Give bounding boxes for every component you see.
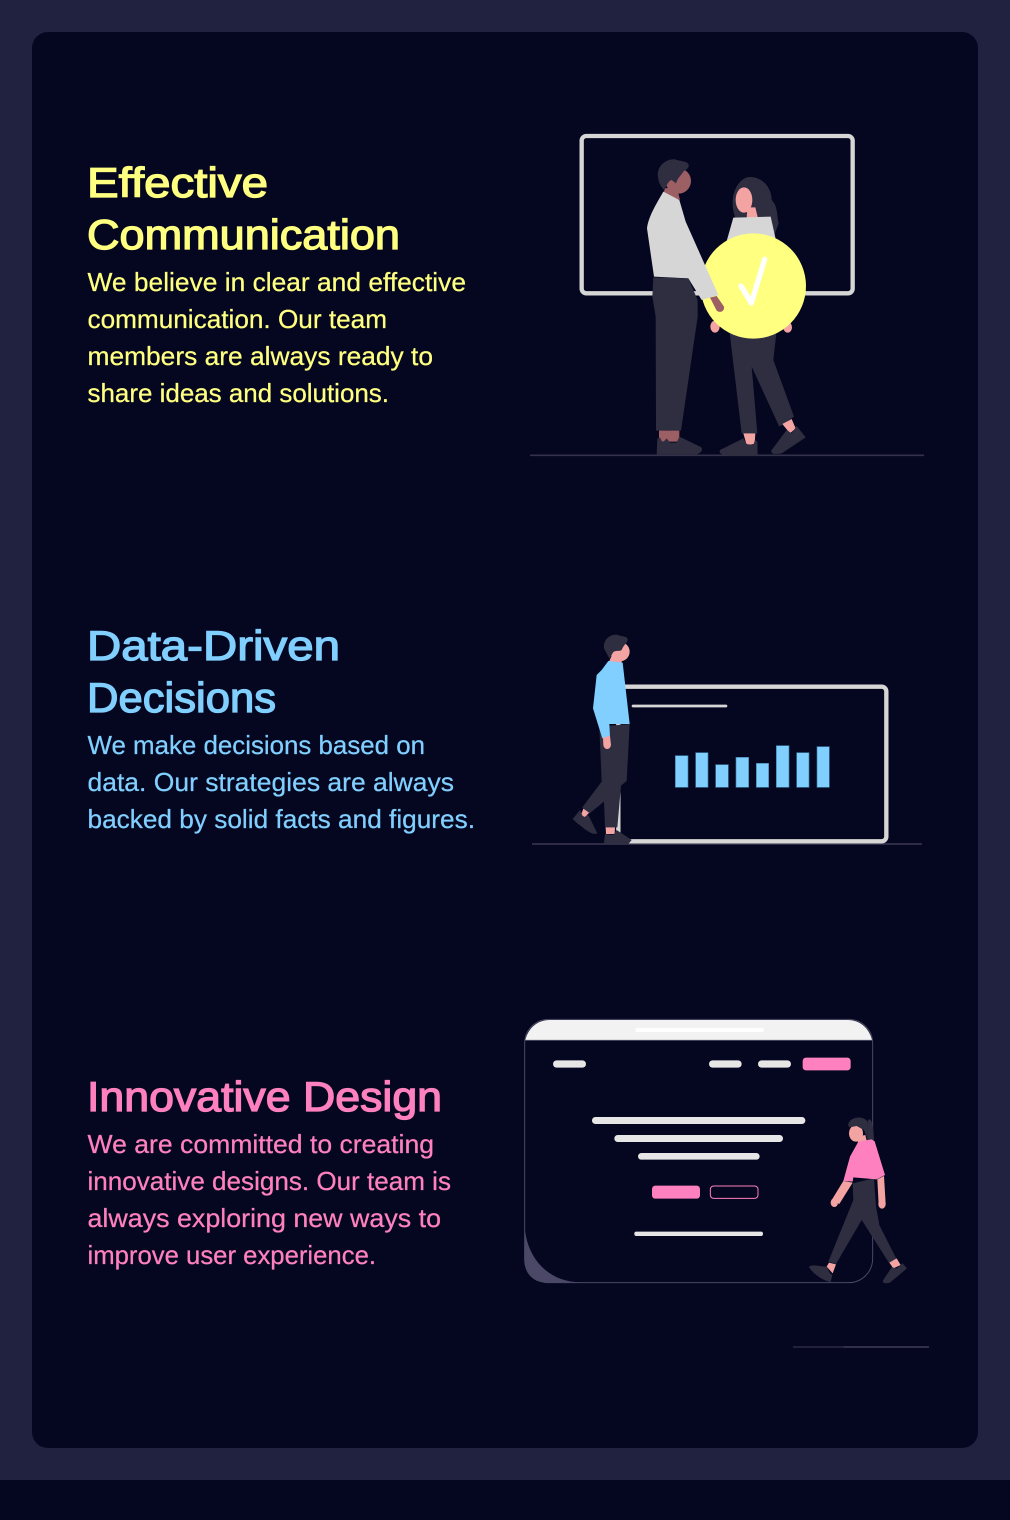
heading: Data-Driven Decisions: Data-Driven xyxy=(87,622,340,669)
hero text lines xyxy=(592,1117,805,1236)
text block: data description: We make decisions based on xyxy=(88,730,425,760)
board title line xyxy=(633,702,726,710)
illustration: man with bar chart board xyxy=(532,635,922,844)
ground line xyxy=(793,1345,929,1349)
text block: data description xyxy=(88,730,475,834)
man xyxy=(647,159,724,454)
woman xyxy=(710,177,806,456)
text block: design description xyxy=(88,1129,451,1270)
illustration: two people with check badge xyxy=(530,136,924,456)
man figure xyxy=(573,635,632,844)
heading: Data-Driven Decisions xyxy=(87,622,340,721)
section: innovative design text xyxy=(87,1073,451,1270)
text block: data description: data. Our strategies are always xyxy=(88,767,454,797)
heading: Effective Communication: Communication xyxy=(87,211,400,258)
ground line xyxy=(530,453,924,458)
text block: communication description xyxy=(88,267,466,408)
board frame xyxy=(618,687,886,841)
section: effective communication text xyxy=(87,159,466,408)
text block: design description: always exploring new ways to xyxy=(88,1203,441,1233)
illustration: browser mockup with walking woman xyxy=(524,1019,929,1347)
ground line xyxy=(532,841,922,846)
text block: communication description: share ideas and solutions. xyxy=(88,378,389,408)
text block: communication description: We believe in clear and effective xyxy=(88,267,466,297)
heading: Data-Driven Decisions: Decisions xyxy=(87,674,276,721)
text block: communication description: members are always ready to xyxy=(88,341,433,371)
heading: Effective Communication: Effective xyxy=(87,159,268,206)
walking woman xyxy=(809,1118,907,1283)
bar chart xyxy=(675,746,829,787)
frame xyxy=(582,136,853,293)
text block: data description: backed by solid facts and figures. xyxy=(88,804,475,834)
text block: design description: improve user experience. xyxy=(88,1240,376,1270)
heading: Innovative Design: Innovative Design xyxy=(87,1073,442,1120)
heading: Effective Communication xyxy=(87,159,400,258)
nav bar pills xyxy=(553,1058,851,1070)
text block: communication description: communication. Our team xyxy=(88,304,387,334)
text block: design description: innovative designs. Our team is xyxy=(88,1166,451,1196)
buttons xyxy=(652,1186,758,1199)
text block: design description: We are committed to creating xyxy=(88,1129,434,1159)
browser window xyxy=(524,1019,873,1283)
icon: yellow check badge xyxy=(701,233,806,339)
section: data-driven decisions text xyxy=(87,622,475,834)
